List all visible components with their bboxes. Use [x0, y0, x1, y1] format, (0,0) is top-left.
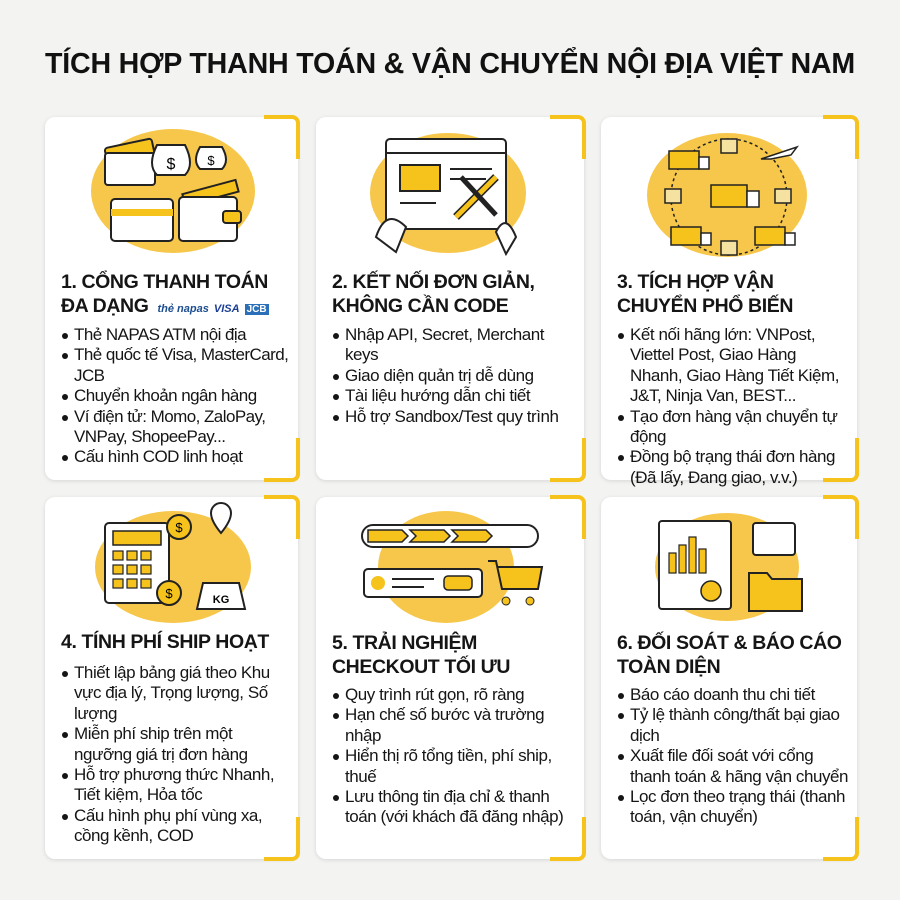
- heading: [617, 270, 793, 317]
- bullet list: Ví điện tử: Momo, ZaloPay, VNPay, ShopeePay...: [74, 407, 265, 446]
- bullet list: [62, 325, 288, 466]
- bullet list: [333, 325, 559, 426]
- bullet list: Tạo đơn hàng vận chuyển tự động: [630, 407, 837, 446]
- icon: delivery network: [647, 133, 807, 257]
- bullet list: [618, 325, 839, 487]
- bullet list: Kết nối hãng lớn: VNPost, Viettel Post, Giao Hàng Nhanh, Giao Hàng Tiết Kiệm, J&T, Ninja Van, BEST...: [630, 325, 839, 405]
- bullet list: Báo cáo doanh thu chi tiết: [630, 685, 815, 704]
- bullet list: Quy trình rút gọn, rõ ràng: [345, 685, 524, 704]
- panel: card 1 payment gateway: [45, 117, 298, 480]
- bullet list: Tỷ lệ thành công/thất bại giao dịch: [630, 705, 840, 745]
- icon: calculator and weight: $: [165, 586, 173, 601]
- bullet list: Tài liệu hướng dẫn chi tiết: [345, 386, 530, 405]
- panel: card 4 shipping fee: [45, 497, 298, 859]
- title: TÍCH HỢP THANH TOÁN & VẬN CHUYỂN NỘI ĐỊA VIỆT NAM: [45, 48, 855, 80]
- icon: calculator and weight: [95, 502, 251, 623]
- bullet list: Cấu hình COD linh hoạt: [74, 447, 242, 466]
- icon: checkout steps and cart: [361, 511, 544, 623]
- heading: [617, 632, 842, 678]
- heading: ĐA DẠNG thẻ napas VISA JCB: [61, 295, 267, 317]
- panel: card 6 reports: [601, 497, 857, 859]
- bullet list: Lọc đơn theo trạng thái (thanh toán, vận chuyển): [630, 787, 845, 826]
- bullet list: Lưu thông tin địa chỉ & thanh toán (với khách đã đăng nhập): [345, 787, 563, 826]
- icon: cards and money: $: [167, 156, 176, 173]
- heading: 4. TÍNH PHÍ SHIP HOẠT: [61, 631, 269, 653]
- icon: calculator and weight: KG: [213, 594, 229, 606]
- bullet list: Cấu hình phụ phí vùng xa, cồng kềnh, COD: [74, 806, 262, 845]
- heading: 1. CỔNG THANH TOÁN: [61, 271, 268, 293]
- bullet list: Giao diện quản trị dễ dùng: [345, 366, 534, 385]
- bullet list: Thiết lập bảng giá theo Khu vực địa lý, Trọng lượng, Số lượng: [74, 663, 270, 723]
- panel: card 5 checkout: [316, 497, 584, 859]
- icon: calculator and weight: $: [175, 520, 183, 535]
- bullet list: [333, 685, 563, 826]
- bullet list: Thẻ NAPAS ATM nội địa: [74, 325, 246, 344]
- bullet list: Đồng bộ trạng thái đơn hàng (Đã lấy, Đang giao, v.v.): [630, 447, 835, 487]
- bullet list: Hạn chế số bước và trường nhập: [345, 705, 544, 745]
- bullet list: Chuyển khoản ngân hàng: [74, 386, 257, 405]
- panel: card 3 shipping: [601, 117, 857, 480]
- heading: TOÀN DIỆN: [617, 656, 720, 678]
- heading: [332, 632, 510, 678]
- heading: CHECKOUT TỐI ƯU: [332, 656, 510, 678]
- bullet list: Hỗ trợ phương thức Nhanh, Tiết kiệm, Hỏa tốc: [74, 765, 274, 804]
- heading: [332, 270, 535, 317]
- heading: 5. TRẢI NGHIỆM: [332, 632, 477, 654]
- heading: KHÔNG CẦN CODE: [332, 295, 508, 317]
- heading: 6. ĐỐI SOÁT & BÁO CÁO: [617, 632, 842, 654]
- icon: browser with tools: [370, 133, 526, 256]
- bullet list: Hỗ trợ Sandbox/Test quy trình: [345, 407, 559, 426]
- icon: report and folder: [655, 513, 803, 621]
- panel: card 2 simple connection: [316, 117, 584, 480]
- heading: CHUYỂN PHỔ BIẾN: [617, 295, 793, 317]
- icon: cards and money: [91, 129, 255, 253]
- bullet list: Miễn phí ship trên một ngưỡng giá trị đơn hàng: [74, 724, 248, 764]
- heading: 3. TÍCH HỢP VẬN: [617, 271, 774, 293]
- heading: [61, 270, 269, 317]
- bullet list: [618, 685, 848, 826]
- bullet list: Hiển thị rõ tổng tiền, phí ship, thuế: [345, 746, 552, 786]
- bullet list: [62, 663, 274, 845]
- bullet list: Thẻ quốc tế Visa, MasterCard, JCB: [74, 345, 288, 385]
- bullet list: Xuất file đối soát với cổng thanh toán & hãng vận chuyển: [630, 746, 848, 786]
- icon: cards and money: $: [207, 153, 215, 168]
- bullet list: Nhập API, Secret, Merchant keys: [345, 325, 544, 364]
- heading: 2. KẾT NỐI ĐƠN GIẢN,: [332, 271, 535, 293]
